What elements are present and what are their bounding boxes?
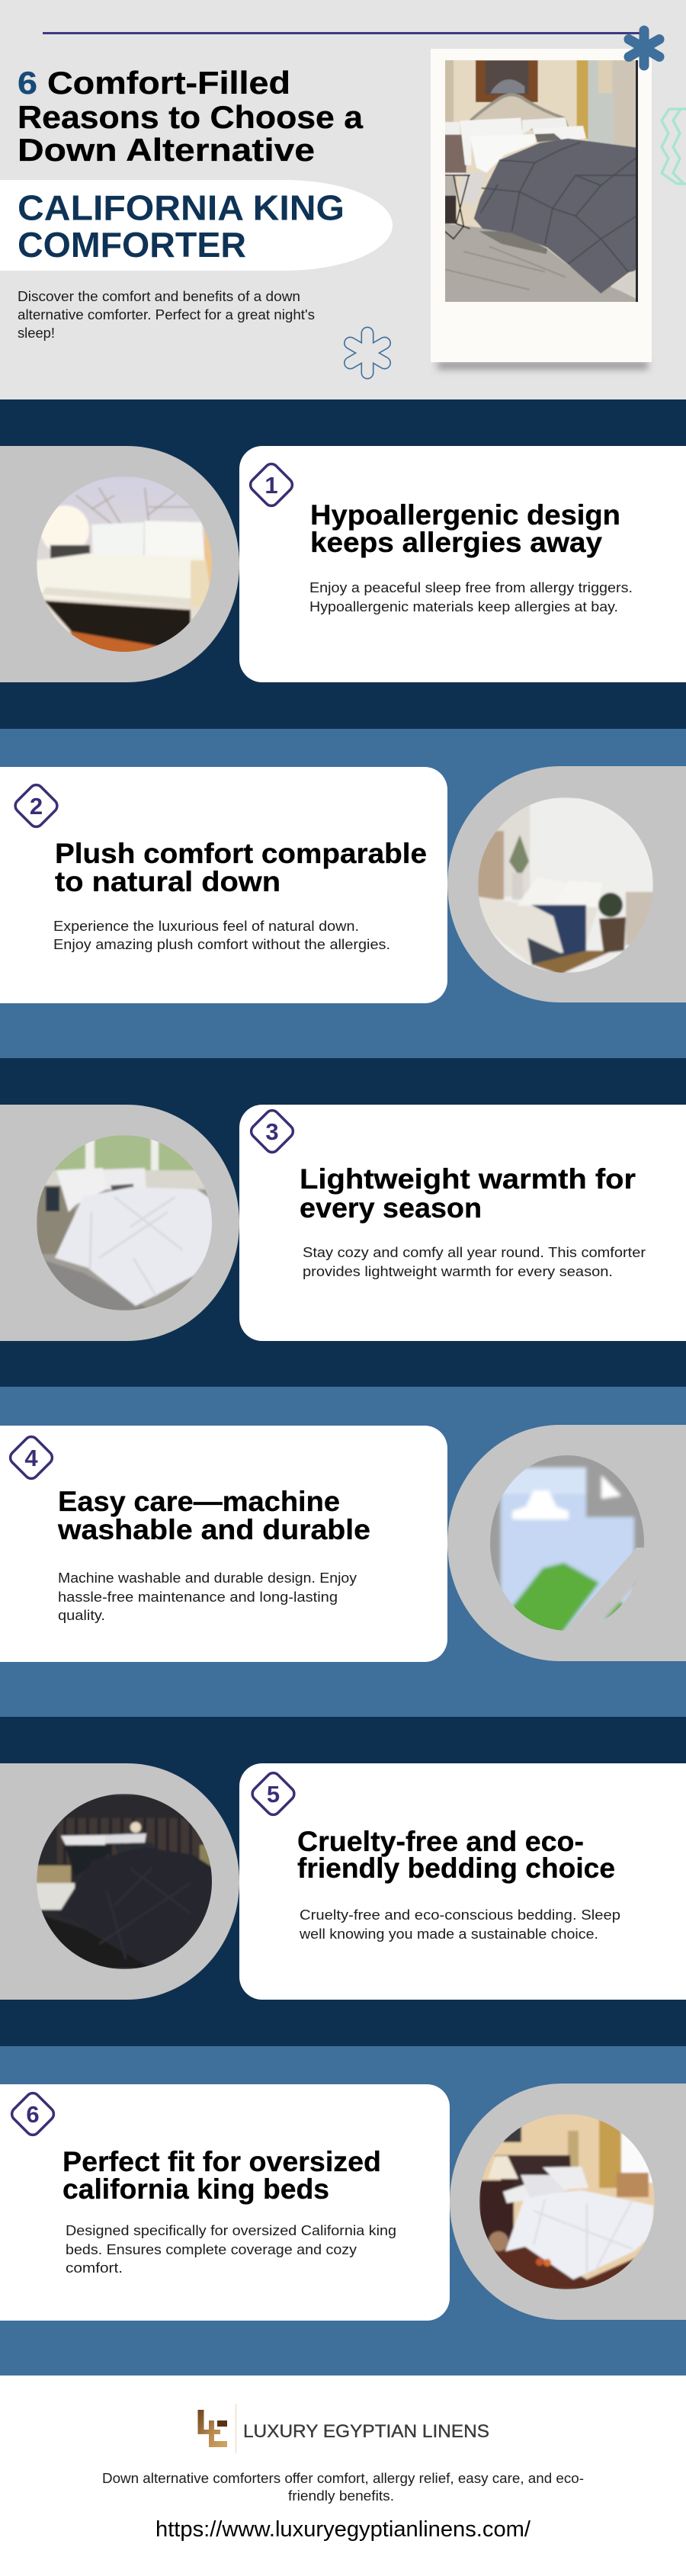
heading: friendly bedding choice — [297, 1853, 615, 1884]
heading: every season — [300, 1192, 482, 1224]
heading: Lightweight warmth for — [300, 1163, 636, 1195]
body text — [58, 1570, 357, 1623]
number badge 2: 2 — [30, 793, 43, 820]
subtitle pill — [0, 180, 393, 271]
body text: Enjoy amazing plush comfort without the allergies. — [53, 937, 390, 952]
panel: header — [0, 0, 686, 399]
number badge 3 — [248, 1108, 296, 1155]
heading: Cruelty-free and eco- — [297, 1826, 584, 1857]
body text: provides lightweight warmth for every season. — [303, 1264, 613, 1279]
body text — [309, 580, 633, 614]
heading — [55, 838, 427, 897]
title: Down Alternative — [18, 132, 315, 168]
heading: Easy care—machine — [58, 1486, 340, 1517]
closing text — [102, 2471, 584, 2504]
number badge 4: 4 — [24, 1445, 38, 1471]
photo: blurred broken-image placeholder — [488, 1452, 648, 1635]
body text — [303, 1245, 646, 1279]
heading — [297, 1826, 615, 1884]
grey photo backing — [447, 766, 686, 1002]
subtitle pill: CALIFORNIA KING — [18, 188, 345, 227]
heading: Perfect fit for oversized — [63, 2146, 381, 2177]
white card — [239, 1763, 686, 2000]
photo: white comforter in warm room — [479, 2114, 656, 2289]
closing text: friendly benefits. — [288, 2488, 394, 2504]
title: 6 Comfort-Filled — [18, 65, 290, 101]
photo: white pintuck comforter — [37, 1135, 213, 1311]
heading: Hypoallergenic design — [310, 499, 620, 531]
white card — [0, 1426, 447, 1662]
number badge 1: 1 — [264, 472, 278, 499]
grey photo backing — [450, 2084, 686, 2320]
panel: reason 3 — [0, 1058, 686, 1387]
photo: dark pintuck comforter — [37, 1794, 213, 1969]
heading — [310, 499, 620, 558]
number badge 4 — [8, 1434, 55, 1481]
website url: https://www.luxuryegyptianlinens.com/ — [155, 2517, 531, 2542]
body text: beds. Ensures complete coverage and cozy — [66, 2242, 357, 2257]
white card — [239, 446, 686, 682]
panel: reason 5 — [0, 1717, 686, 2046]
heading — [57, 1486, 370, 1545]
panel: reason 1 — [0, 399, 686, 729]
photo: grey comforter on ornate bed — [445, 60, 638, 302]
grey photo backing — [0, 1105, 239, 1341]
white card — [0, 2084, 450, 2321]
intro text — [18, 289, 315, 341]
heading: to natural down — [55, 866, 280, 897]
body text: Experience the luxurious feel of natural down. — [53, 919, 359, 934]
body text: well knowing you made a sustainable choice. — [299, 1926, 598, 1942]
decorative wave outline — [662, 109, 686, 184]
heading: Plush comfort comparable — [55, 838, 427, 869]
heading — [300, 1163, 636, 1224]
panel: reason 6 — [0, 2046, 686, 2376]
title: Reasons to Choose a — [18, 99, 364, 135]
number badge 6 — [9, 2090, 56, 2138]
number badge 6: 6 — [26, 2101, 40, 2128]
icon: outline flower — [351, 333, 384, 373]
logo mark — [198, 2404, 236, 2453]
body text: Stay cozy and comfy all year round. This comforter — [303, 1245, 646, 1260]
body text: hassle-free maintenance and long-lasting — [58, 1590, 338, 1605]
grey photo backing — [447, 1425, 686, 1661]
white card — [239, 1105, 686, 1341]
body text: Cruelty-free and eco-conscious bedding. Sleep — [300, 1907, 620, 1923]
panel: reason 4 — [0, 1387, 686, 1717]
photo: white bed with dark base — [37, 476, 213, 656]
grey photo backing — [0, 1763, 239, 2000]
intro text: Discover the comfort and benefits of a down — [18, 289, 300, 304]
number badge 2 — [12, 782, 60, 829]
grey photo backing — [0, 446, 239, 682]
number badge 3: 3 — [265, 1118, 279, 1145]
number badge 5: 5 — [267, 1781, 280, 1808]
photo frame with shadow — [431, 49, 652, 369]
title — [18, 65, 364, 168]
body text — [66, 2223, 396, 2276]
number badge 5 — [249, 1770, 297, 1817]
body text — [53, 919, 390, 952]
white card — [0, 767, 447, 1003]
body text: Enjoy a peaceful sleep free from allergy triggers. — [309, 580, 633, 595]
closing text: Down alternative comforters offer comfort, allergy relief, easy care, and eco- — [102, 2471, 584, 2486]
heading: california king beds — [63, 2173, 329, 2205]
body text: Machine washable and durable design. Enjoy — [58, 1570, 357, 1586]
panel: footer — [0, 2376, 686, 2576]
body text: Designed specifically for oversized California king — [66, 2223, 396, 2238]
body text: Hypoallergenic materials keep allergies at bay. — [309, 599, 618, 614]
heading: keeps allergies away — [310, 527, 602, 558]
intro text: sleep! — [18, 326, 55, 341]
brand name: LUXURY EGYPTIAN LINENS — [243, 2421, 489, 2442]
top rule line — [43, 32, 640, 34]
panel: reason 2 — [0, 729, 686, 1058]
body text: comfort. — [66, 2260, 123, 2276]
body text — [299, 1907, 620, 1942]
intro text: alternative comforter. Perfect for a great night's — [18, 307, 315, 322]
heading — [63, 2146, 381, 2205]
photo: bed with navy throw by window — [478, 797, 653, 974]
subtitle pill: COMFORTER — [18, 225, 246, 265]
icon: solid blue asterisk — [629, 30, 659, 66]
heading: washable and durable — [57, 1514, 370, 1545]
body text: quality. — [58, 1608, 105, 1623]
number badge 1 — [248, 461, 295, 508]
